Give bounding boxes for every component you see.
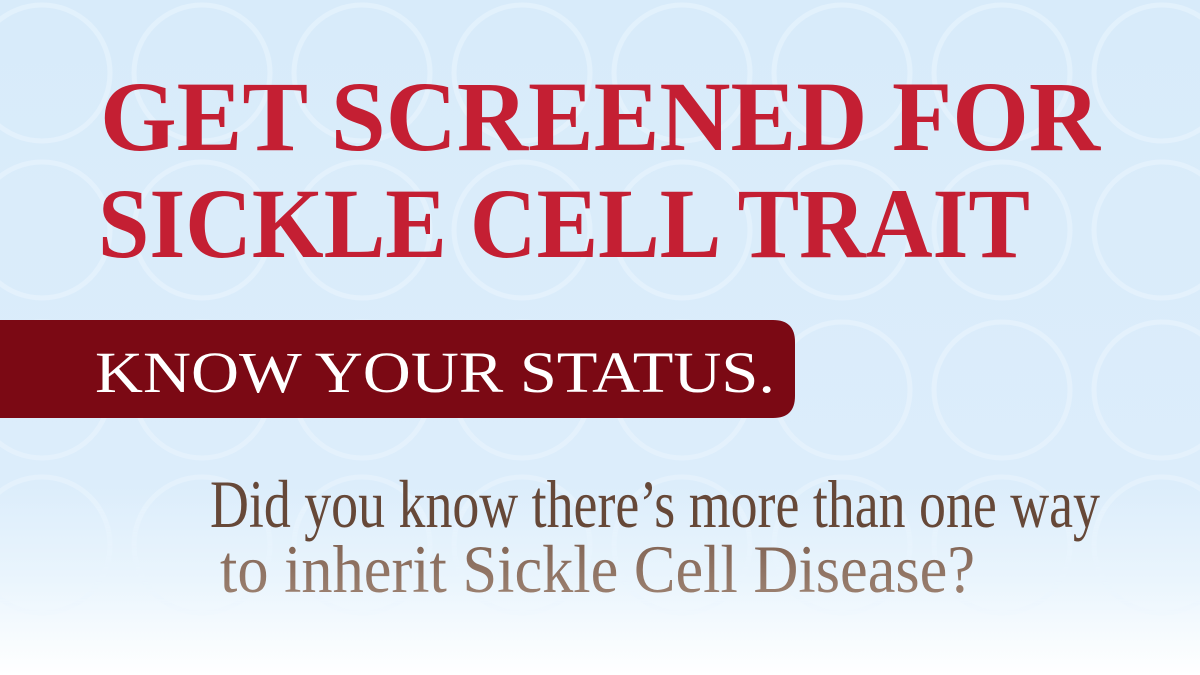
banner: know your status <box>0 320 795 418</box>
subtitle question: to inherit Sickle Cell Disease? <box>220 531 975 607</box>
title <box>98 61 1102 279</box>
banner: know your status: KNOW YOUR STATUS. <box>95 340 775 405</box>
subtitle question <box>210 466 1100 607</box>
title: SICKLE CELL TRAIT <box>98 168 1030 279</box>
background circle pattern <box>0 2 1200 482</box>
title: GET SCREENED FOR <box>100 61 1102 172</box>
